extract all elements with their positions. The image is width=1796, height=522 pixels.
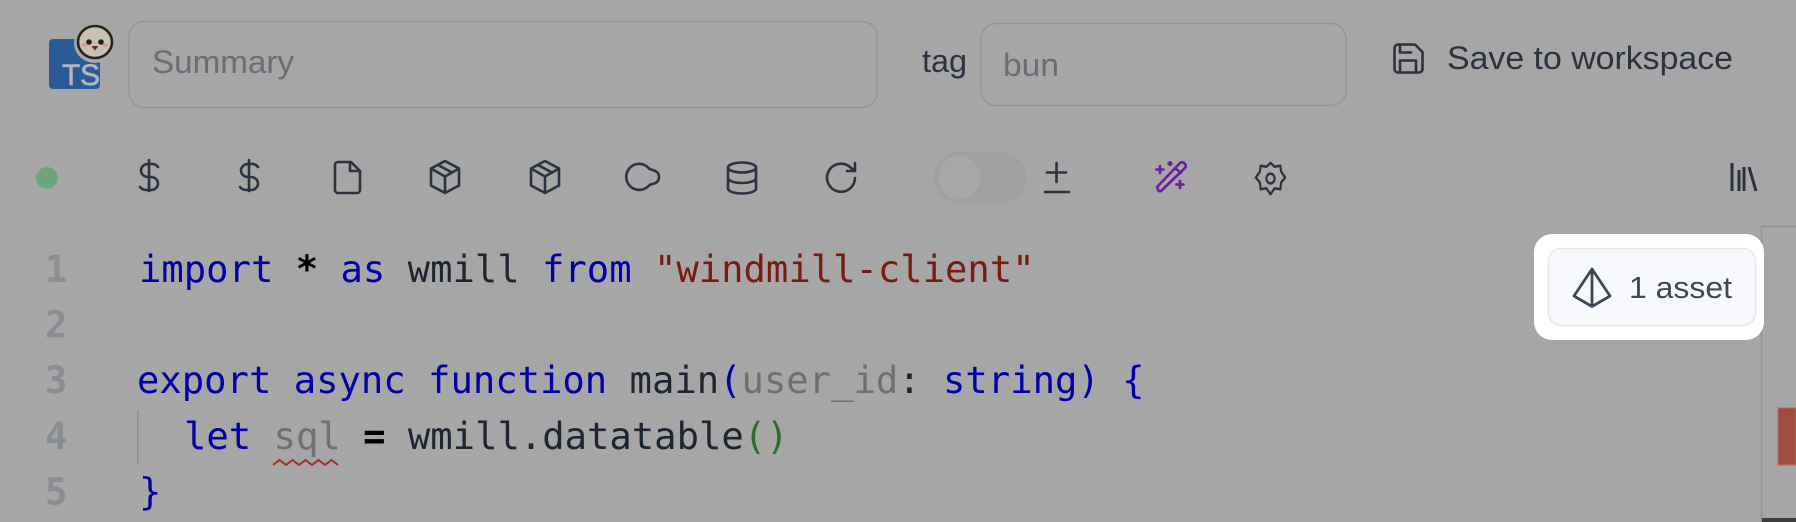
save to workspace button	[1394, 40, 1733, 76]
line numbers: 4	[45, 414, 67, 458]
icon: package 1	[431, 161, 459, 193]
callout: asset highlight	[1534, 234, 1764, 340]
tag value: bun	[1003, 47, 1059, 83]
code line 3: export async function main(user_id: string) {	[137, 358, 1145, 403]
toolbar icons	[140, 152, 1756, 203]
line numbers: 5	[45, 469, 67, 513]
line numbers: 3	[45, 358, 67, 402]
icon: refresh	[827, 163, 855, 192]
icon: asset pyramid	[1574, 269, 1610, 306]
indent guide	[137, 410, 138, 465]
icon: TypeScript Bun logo: TS	[62, 59, 100, 92]
icon: bun outline	[626, 164, 659, 190]
icon: database	[728, 162, 756, 194]
line numbers: 1	[45, 247, 67, 291]
code line 1: import * as wmill from "windmill-client"	[139, 247, 1035, 291]
icon: dollar 2	[240, 160, 258, 191]
line numbers	[45, 247, 67, 513]
code line 5: }	[139, 469, 161, 513]
icon: save	[1394, 44, 1422, 72]
icon: status dot	[36, 167, 58, 189]
line numbers: 2	[45, 303, 67, 347]
toggle switch	[933, 152, 1027, 203]
summary placeholder: Summary	[152, 44, 294, 80]
icon: file	[335, 162, 360, 193]
icon: package 2	[531, 161, 559, 193]
icon: magic wand	[1156, 162, 1186, 191]
icon: settings gear	[1256, 163, 1285, 194]
minimap error marker	[1778, 408, 1796, 465]
minimap	[1762, 226, 1796, 522]
icon: plus minus	[1045, 163, 1069, 192]
tag input	[981, 24, 1346, 106]
summary input	[129, 22, 877, 108]
save label: Save to workspace	[1447, 40, 1733, 76]
asset button	[1548, 248, 1756, 326]
asset label: 1 asset	[1629, 270, 1732, 305]
icon: library	[1732, 163, 1756, 191]
code line 4: let sql = wmill.datatable()	[184, 414, 789, 458]
tag label: tag	[922, 43, 967, 79]
code block	[137, 247, 1145, 513]
icon: TypeScript Bun logo	[49, 23, 116, 92]
squiggle underline	[273, 460, 338, 465]
icon: dollar 1	[140, 160, 158, 191]
